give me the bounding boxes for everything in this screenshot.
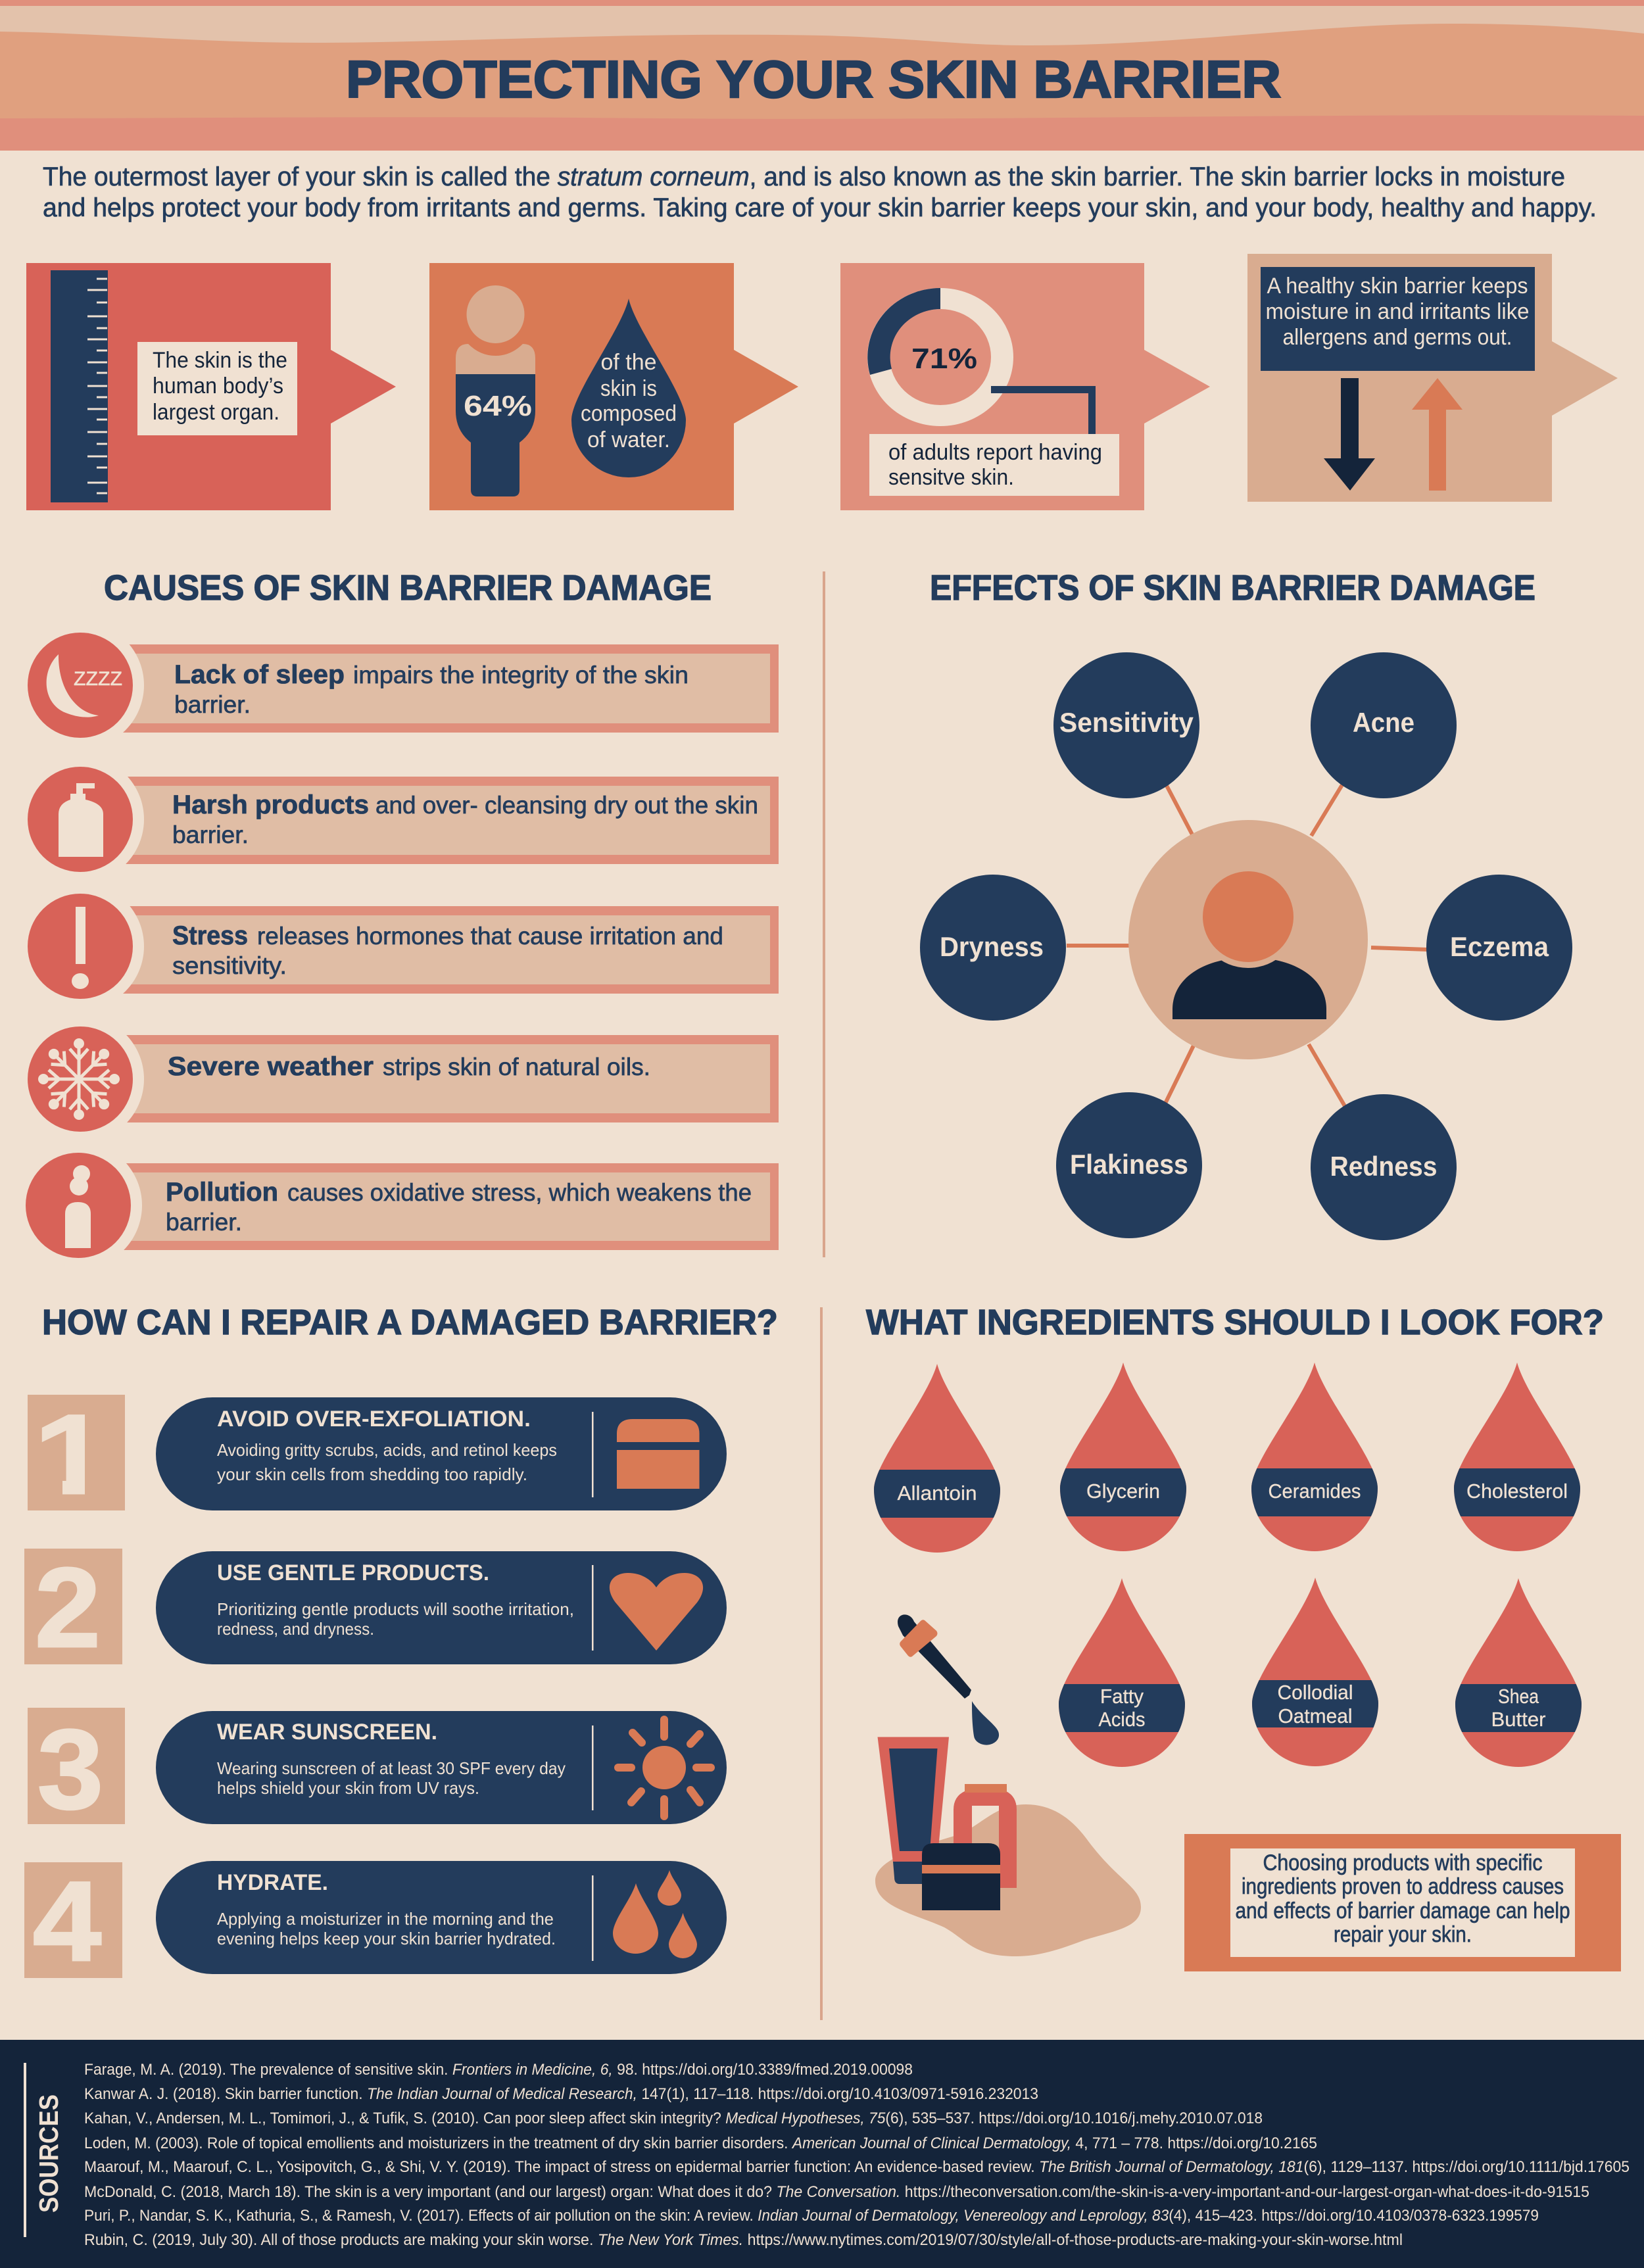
icon: moon (47, 654, 122, 717)
pill: wear sunscreen (156, 1711, 727, 1824)
text: pollution: barrier. (166, 1209, 242, 1236)
text: pollution (166, 1178, 752, 1236)
callout: sensitive skin: sensitve skin. (888, 465, 1014, 490)
number 4: 4 (33, 1858, 101, 1985)
text: lack of sleep: barrier. (174, 691, 251, 718)
callout: choosing products: repair your skin. (1334, 1922, 1472, 1947)
ingredient: shea butter: Butter (1491, 1708, 1545, 1731)
cause: stress (16, 882, 779, 1010)
reference list: Kahan, V., Andersen, M. L., Tomimori, J., & Tufik, S. (2010). Can poor sleep affect skin integrity? Medical Hypotheses, 75(6), 535–537. https://doi.org/10.1016/j.mehy.2010.07.018 (84, 2110, 1263, 2127)
icon: heart (610, 1573, 703, 1651)
effect: redness: Redness (1330, 1151, 1438, 1182)
callout: largest organ: largest organ. (153, 400, 279, 425)
reference list: Kanwar A. J. (2018). Skin barrier function. The Indian Journal of Medical Research, 147(1), 117–118. https://doi.org/10.4103/0971-5916.232013 (84, 2085, 1038, 2103)
effect: flakiness: Flakiness (1070, 1149, 1188, 1180)
intro text: The outermost layer of your skin is called the stratum corneum, and is also known as the skin barrier. The skin barrier locks in moisture (43, 162, 1565, 191)
icon: water drop with text: of water. (587, 427, 670, 452)
heading: repair: HOW CAN I REPAIR A DAMAGED BARRIER? (42, 1303, 778, 1342)
ingredient: shea butter (1455, 1578, 1582, 1767)
text: stress: sensitivity. (172, 952, 287, 979)
icon: moon: ZZZZ (74, 668, 122, 690)
intro text (43, 162, 1597, 222)
text: stress: releases hormones that cause irritation and (257, 923, 723, 950)
reference list: Farage, M. A. (2019). The prevalence of sensitive skin. Frontiers in Medicine, 6, 98. https://doi.org/10.3389/fmed.2019.00098 (84, 2061, 913, 2079)
donut chart 71% (867, 288, 1013, 426)
icon: person: 64% (464, 390, 532, 422)
icon: pump bottle (59, 783, 103, 857)
pill: avoid over-exfoliation: your skin cells from shedding too rapidly. (217, 1464, 527, 1484)
effect: acne (1311, 652, 1457, 798)
effect: sensitivity (1053, 652, 1199, 798)
step 3 (28, 1706, 727, 1833)
text: pollution: causes oxidative stress, which weakens the (287, 1179, 752, 1206)
text: harsh products: and over- cleansing dry out the skin (375, 792, 758, 819)
number 1 (28, 1391, 125, 1518)
effect: eczema (1426, 875, 1572, 1021)
number 3: 3 (37, 1706, 103, 1833)
icon: water drop with text: composed (581, 401, 677, 426)
pill: hydrate: HYDRATE. (217, 1870, 328, 1895)
reference list: McDonald, C. (2018, March 18). The skin is a very important (and our largest) organ: What does it do? The Conversation. https://theconversation.com/the-skin-is-a-very-important-and-our-largest-organ-what-does-it-do-91515 (84, 2183, 1589, 2201)
effect: dryness: Dryness (940, 931, 1044, 962)
icon: water drop with text: skin is (600, 376, 657, 401)
icon: water drop with text: of the (601, 350, 656, 375)
bottle (954, 1784, 1017, 1888)
effect: redness (1311, 1094, 1457, 1240)
pill: use gentle products: redness, and dryness. (217, 1619, 374, 1639)
callout: largest organ: human body’s (153, 374, 283, 398)
text: harsh products: barrier. (172, 821, 249, 848)
text: lack of sleep: Lack of sleep (174, 660, 345, 689)
pill: wear sunscreen: Wearing sunscreen of at least 30 SPF every day (217, 1758, 566, 1778)
text: harsh products (172, 790, 758, 848)
icon: smokestack (65, 1165, 91, 1248)
step 2 (24, 1545, 727, 1671)
footer: sources (0, 2040, 1644, 2268)
icon: ruler (51, 270, 108, 502)
pill: avoid over-exfoliation (156, 1397, 727, 1510)
text: lack of sleep: impairs the integrity of the skin (353, 662, 689, 688)
diagram: effects hub and spokes (920, 652, 1572, 1240)
icon: jar (617, 1419, 700, 1489)
icon: water drops (613, 1870, 697, 1958)
pill: use gentle products (156, 1551, 727, 1664)
callout: choosing products: and effects of barrier damage can help (1235, 1898, 1570, 1923)
reference list: Maarouf, M., Maarouf, C. L., Yosipovitch, G., & Shi, V. Y. (2019). The impact of stress on epidermal barrier function: An evidence-based review. The British Journal of Dermatology, 181(6), 1129–1137. https://doi.org/10.1111/bjd.17605 (84, 2158, 1630, 2176)
text: pollution: Pollution (166, 1178, 278, 1207)
text: lack of sleep (174, 660, 689, 718)
ingredient: cholesterol: Cholesterol (1466, 1480, 1568, 1503)
arrow: down (1324, 378, 1375, 491)
callout: choosing products: Choosing products with specific (1263, 1850, 1543, 1875)
ingredient: cholesterol (1454, 1363, 1580, 1551)
arrow: up (1412, 378, 1463, 491)
number 3 (28, 1706, 125, 1833)
intro text: and helps protect your body from irritants and germs. Taking care of your skin barrier keeps your skin, and your body, healthy and happy. (43, 193, 1597, 222)
heading: effects: EFFECTS OF SKIN BARRIER DAMAGE (930, 568, 1535, 608)
ingredient: fatty acids: Fatty (1100, 1685, 1144, 1708)
pill: avoid over-exfoliation: AVOID OVER-EXFOLIATION. (217, 1407, 531, 1432)
pill: hydrate: Applying a moisturizer in the morning and the (217, 1909, 554, 1929)
pill: wear sunscreen: WEAR SUNSCREEN. (217, 1720, 437, 1745)
icon: person (456, 285, 535, 496)
dropper (898, 1614, 999, 1745)
callout: sensitive skin (869, 434, 1119, 496)
text: stress: Stress (172, 921, 248, 950)
ingredient: collodial oatmeal: Oatmeal (1278, 1704, 1352, 1727)
callout: sensitive skin: of adults report having (888, 440, 1102, 465)
callout: choosing products: ingredients proven to address causes (1242, 1874, 1564, 1899)
panel: healthy barrier (1247, 254, 1618, 502)
ingredient: glycerin (1060, 1363, 1186, 1551)
donut chart 71%: 71% (911, 343, 977, 375)
effect: eczema: Eczema (1450, 931, 1549, 962)
ingredient: shea butter: Shea (1498, 1685, 1539, 1708)
pill: wear sunscreen: helps shield your skin from UV rays. (217, 1778, 479, 1798)
callout: largest organ: The skin is the (153, 348, 287, 373)
pill: use gentle products: Prioritizing gentle products will soothe irritation, (217, 1599, 574, 1619)
callout: largest organ (137, 342, 297, 435)
number 4 (24, 1858, 122, 1985)
ingredient: allantoin: Allantoin (898, 1482, 977, 1505)
jar (922, 1843, 1000, 1910)
effect: flakiness (1056, 1092, 1202, 1238)
heading: causes: CAUSES OF SKIN BARRIER DAMAGE (104, 568, 712, 608)
reference list: Rubin, C. (2019, July 30). All of those products are making your skin worse. The New York Times. https://www.nytimes.com/2019/07/30/style/all-of-those-products-are-making-your-skin-worse.html (84, 2231, 1403, 2249)
reference list (84, 2061, 1630, 2249)
reference list: Puri, P., Nandar, S. K., Kathuria, S., & Ramesh, V. (2017). Effects of air pollution on the skin: A review. Indian Journal of Dermatology, Venereology and Leprology, 83(4), 415–423. https://doi.org/10.4103/0378-6323.199579 (84, 2207, 1539, 2225)
number 2: 2 (35, 1545, 101, 1671)
pill: hydrate: evening helps keep your skin barrier hydrated. (217, 1929, 556, 1948)
step 1 (28, 1391, 727, 1518)
text: severe weather: Severe weather (168, 1052, 374, 1081)
callout: healthy barrier text: allergens and germs out. (1282, 325, 1512, 350)
cause: lack of sleep (16, 621, 779, 749)
text: stress (172, 921, 723, 979)
ingredient: allantoin (874, 1364, 1000, 1553)
heading: ingredients: WHAT INGREDIENTS SHOULD I LOOK FOR? (866, 1303, 1604, 1342)
number 1: 1 (33, 1391, 114, 1518)
icon: exclamation mark (72, 907, 89, 989)
ingredient: collodial oatmeal: Collodial (1277, 1681, 1353, 1704)
callout: healthy barrier text: A healthy skin barrier keeps (1267, 274, 1528, 299)
cause: severe weather (16, 1015, 779, 1143)
tube (877, 1737, 949, 1884)
panel: sensitive skin statistic (840, 263, 1210, 510)
connector line (991, 389, 1092, 434)
reference list: Loden, M. (2003). Role of topical emollients and moisturizers in the treatment of dry skin barrier disorders. American Journal of Clinical Dermatology, 4, 771 – 778. https://doi.org/10.2165 (84, 2135, 1317, 2152)
text: severe weather: strips skin of natural oils. (383, 1053, 650, 1080)
ingredient: fatty acids: Acids (1098, 1708, 1146, 1731)
panel: water composition (429, 263, 798, 510)
pill: avoid over-exfoliation: Avoiding gritty scrubs, acids, and retinol keeps (217, 1440, 557, 1460)
pill: use gentle products: USE GENTLE PRODUCTS. (217, 1560, 489, 1585)
ingredient: ceramides: Ceramides (1268, 1480, 1361, 1503)
icon: snowflake (38, 1038, 120, 1120)
sources label: SOURCES (34, 2094, 64, 2213)
header banner (0, 0, 1644, 151)
icon: sun (618, 1720, 711, 1816)
cause: harsh products (16, 756, 779, 883)
text: harsh products: Harsh products (172, 790, 369, 819)
callout: healthy barrier text: moisture in and irritants like (1265, 299, 1530, 324)
effect: acne: Acne (1353, 707, 1414, 738)
number 2 (24, 1545, 122, 1671)
icon: water drop with text (571, 299, 686, 477)
callout: healthy barrier text (1261, 267, 1535, 371)
central person (1128, 820, 1368, 1059)
effect: dryness (920, 875, 1066, 1021)
effect: sensitivity: Sensitivity (1059, 707, 1194, 738)
title: PROTECTING YOUR SKIN BARRIER (346, 50, 1281, 109)
ingredient: glycerin: Glycerin (1086, 1480, 1160, 1503)
pill: hydrate (156, 1861, 727, 1974)
ingredient: fatty acids (1059, 1578, 1185, 1767)
callout: choosing products (1184, 1834, 1621, 1971)
ingredient: ceramides (1251, 1363, 1378, 1551)
panel: largest organ (26, 263, 396, 510)
text: severe weather (168, 1052, 650, 1081)
ingredient: collodial oatmeal (1252, 1578, 1378, 1766)
cause: pollution (14, 1142, 779, 1269)
step 4 (24, 1858, 727, 1985)
illustration: skincare products (875, 1614, 1141, 1956)
